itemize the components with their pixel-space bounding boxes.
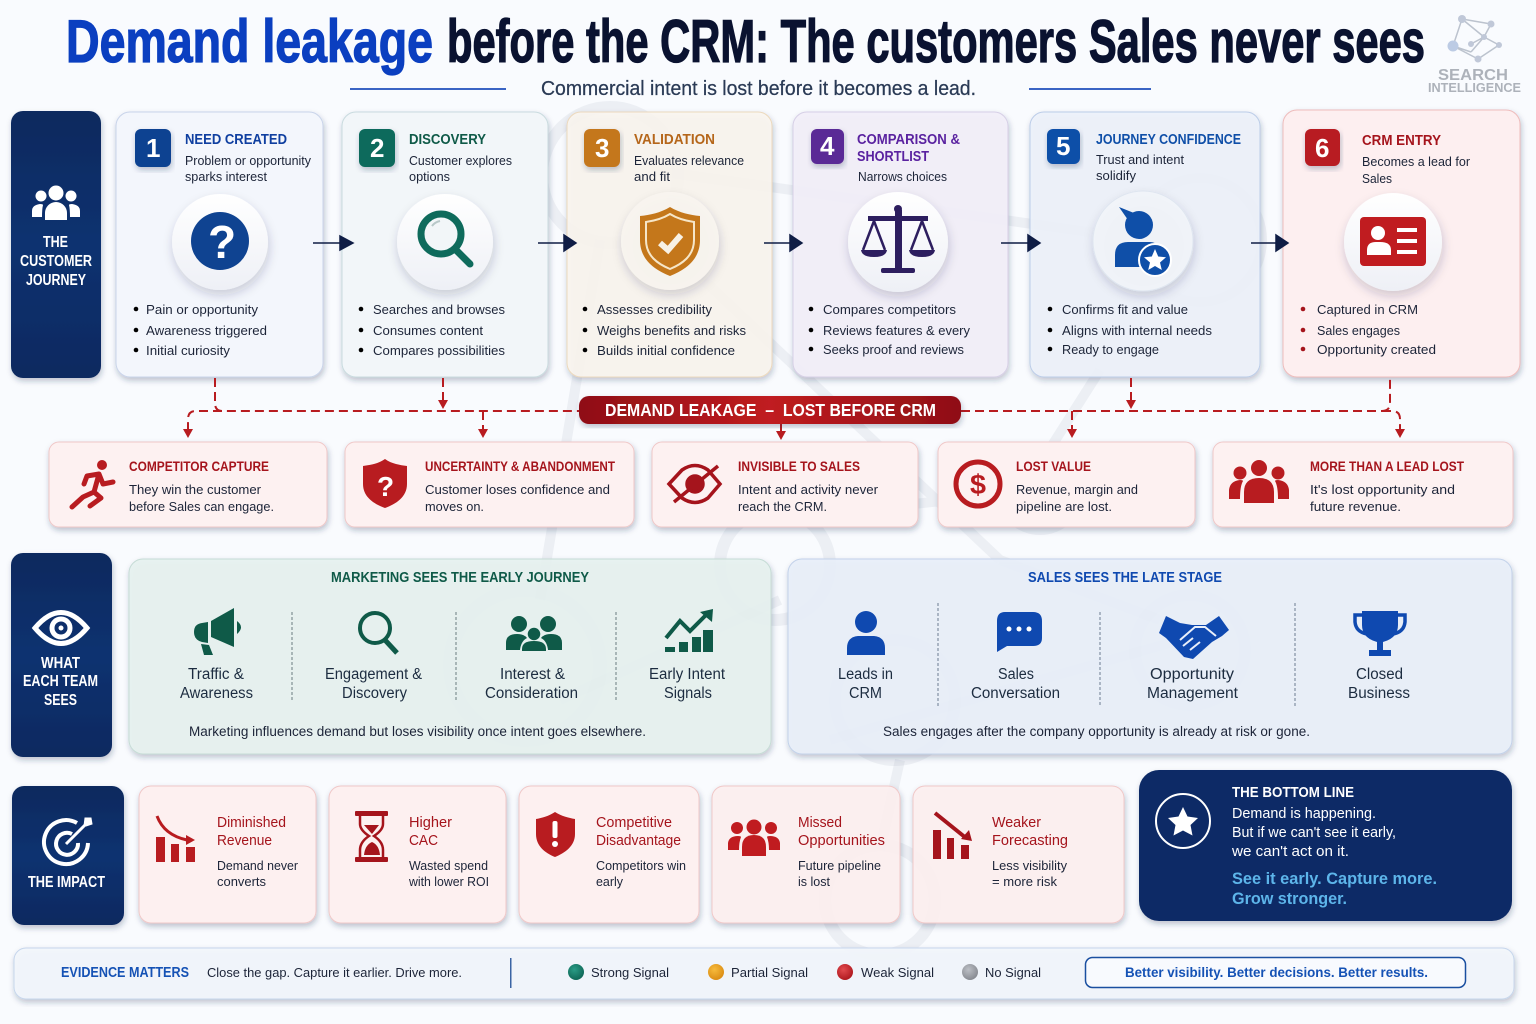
impact card: diminished revenue	[139, 786, 316, 923]
panel: step 6 crm entry: CRM ENTRY	[1362, 133, 1441, 149]
impact card: missed opportunities	[712, 786, 900, 923]
bullet list: Searches and browses	[373, 302, 505, 317]
footer bar: evidence matters and legend	[14, 948, 1514, 999]
icon: eye	[35, 612, 87, 644]
panel: step 2 discovery	[342, 112, 548, 377]
bullet list: Opportunity created	[1317, 342, 1436, 357]
step number 2	[359, 129, 395, 167]
bullet list	[809, 302, 970, 357]
icon: falling bars	[933, 813, 972, 859]
panel: step 4 comparison and shortlist: SHORTLIST	[857, 149, 929, 165]
impact card: missed opportunities: Future pipeline	[798, 858, 881, 873]
icon: hourglass	[355, 811, 388, 862]
bullet list: Aligns with internal needs	[1062, 323, 1213, 338]
item: opportunity management	[1147, 616, 1239, 702]
item: sales conversation	[971, 612, 1060, 702]
icon: shield question	[363, 459, 407, 508]
step number 5	[1047, 129, 1080, 164]
panel: step 4 comparison and shortlist	[793, 112, 1008, 377]
item: opportunity management: Management	[1147, 685, 1239, 702]
footer bar: evidence matters and legend: Close the gap. Capture it earlier. Drive more.	[207, 965, 462, 980]
panel: step 1 need created: Problem or opportunity	[185, 153, 311, 168]
impact card: higher cac: CAC	[409, 832, 438, 849]
impact card: competitive disadvantage: Competitive	[596, 814, 672, 831]
callout: more than a lead lost: MORE THAN A LEAD LOST	[1310, 459, 1465, 474]
legend: strong signal: Strong Signal	[591, 965, 669, 980]
item: opportunity management: Opportunity	[1150, 666, 1234, 683]
icon: people	[1229, 460, 1289, 503]
impact card: diminished revenue: Demand never	[217, 858, 299, 873]
callout: competitor capture: They win the customer	[129, 482, 262, 497]
item: interest and consideration	[485, 616, 578, 702]
subtitle: Commercial intent is lost before it becomes a lead.	[541, 78, 976, 100]
icon: dollar ring: $	[970, 469, 986, 500]
panel: step 1 need created: NEED CREATED	[185, 132, 287, 148]
callout: uncertainty and abandonment	[345, 442, 634, 527]
item: closed business	[1348, 611, 1410, 702]
callout: uncertainty and abandonment: moves on.	[425, 499, 484, 514]
step number 2: 2	[370, 133, 384, 163]
panel: what each team sees: EACH TEAM	[23, 673, 98, 690]
panel: the customer journey: JOURNEY	[26, 272, 87, 289]
panel: step 2 discovery: Customer explores	[409, 153, 512, 168]
icon: question mark	[172, 194, 268, 290]
step number 3	[584, 129, 620, 167]
icon: target	[44, 818, 92, 864]
panel: step 2 discovery: DISCOVERY	[409, 132, 486, 148]
icon: contact card	[1344, 193, 1442, 291]
impact card: weaker forecasting: = more risk	[992, 874, 1057, 889]
logo: search intelligence	[1428, 15, 1521, 95]
item: traffic and awareness: Awareness	[180, 685, 253, 702]
bullet list	[1048, 302, 1213, 357]
panel: what each team sees: WHAT	[41, 655, 80, 672]
panel: sales sees the late stage	[788, 559, 1512, 754]
impact card: competitive disadvantage: Disadvantage	[596, 832, 681, 849]
logo: search intelligence: INTELLIGENCE	[1428, 80, 1521, 95]
callout: invisible to sales: Intent and activity never	[738, 482, 879, 497]
callout: the bottom line: we can't act on it.	[1231, 843, 1349, 860]
callout: the bottom line: See it early. Capture more.	[1232, 869, 1437, 888]
step number 3: 3	[595, 133, 609, 163]
impact card: missed opportunities: Missed	[798, 814, 842, 831]
panel: the customer journey	[11, 111, 101, 378]
bullet list: Assesses credibility	[597, 302, 712, 317]
impact card: higher cac: Wasted spend	[409, 858, 488, 873]
icon: magnifier	[397, 194, 493, 290]
panel: step 2 discovery: options	[409, 169, 450, 184]
bullet list: Sales engages	[1317, 323, 1400, 338]
impact card: missed opportunities: is lost	[798, 874, 830, 889]
bullet list: Consumes content	[373, 323, 483, 338]
callout: competitor capture: COMPETITOR CAPTURE	[129, 459, 269, 474]
panel: step 5 journey confidence	[1030, 112, 1260, 377]
panel: the impact: THE IMPACT	[28, 874, 105, 891]
icon: shield question: ?	[377, 471, 394, 502]
icon: crossed eye	[669, 466, 720, 502]
panel: step 6 crm entry	[1283, 110, 1520, 377]
callout: more than a lead lost: future revenue.	[1310, 499, 1401, 514]
step number 1: 1	[146, 133, 160, 163]
item: early intent signals	[649, 609, 726, 702]
footer bar: evidence matters and legend: EVIDENCE MATTERS	[61, 965, 189, 981]
bullet list: Compares possibilities	[373, 343, 505, 358]
panel: step 6 crm entry: Becomes a lead for	[1362, 154, 1471, 169]
item: early intent signals: Early Intent	[649, 666, 726, 683]
arrows between steps	[313, 235, 1288, 251]
icon: shield alert	[536, 812, 575, 857]
impact card: higher cac: Higher	[409, 814, 452, 831]
impact card: competitive disadvantage: early	[596, 874, 623, 889]
item: engagement and discovery	[325, 613, 423, 702]
panel: step 6 crm entry: Sales	[1362, 171, 1392, 186]
panel: step 3 validation	[567, 112, 772, 377]
impact card: diminished revenue: Revenue	[217, 832, 272, 849]
item: leads in crm: Leads in	[838, 666, 893, 683]
step number 1	[135, 129, 171, 167]
callout: uncertainty and abandonment: Customer loses confidence and	[425, 482, 610, 497]
item: interest and consideration: Consideration	[485, 685, 578, 702]
item: traffic and awareness	[180, 608, 253, 702]
callout: better visibility pill	[1086, 958, 1466, 988]
item: leads in crm: CRM	[849, 685, 882, 702]
banner: demand leakage	[579, 396, 961, 424]
callout: competitor capture: before Sales can engage.	[129, 499, 274, 514]
panel: step 3 validation: VALIDATION	[634, 132, 715, 148]
bullet list: Awareness triggered	[146, 323, 267, 338]
icon: question mark: ?	[208, 216, 236, 268]
callout: the bottom line: THE BOTTOM LINE	[1232, 785, 1354, 801]
panel: step 5 journey confidence: solidify	[1096, 168, 1136, 183]
callout: the bottom line: But if we can't see it early,	[1232, 824, 1396, 841]
callout: more than a lead lost: It's lost opportunity and	[1310, 482, 1455, 497]
panel: what each team sees: SEES	[44, 692, 77, 709]
bullet list	[1301, 302, 1436, 357]
panel: step 4 comparison and shortlist: Narrows choices	[858, 169, 947, 184]
item: engagement and discovery: Discovery	[342, 685, 407, 702]
bullet list: Builds initial confidence	[597, 343, 735, 358]
item: leads in crm	[838, 611, 893, 702]
bullet list: Weighs benefits and risks	[597, 323, 747, 338]
impact card: competitive disadvantage: Competitors win	[596, 858, 686, 873]
bullet list: Seeks proof and reviews	[823, 342, 964, 357]
panel: the customer journey: THE	[43, 234, 68, 251]
callout: the bottom line: Grow stronger.	[1232, 889, 1347, 908]
panel: sales sees the late stage: Sales engages after the company opportunity is already at risk or gone.	[883, 724, 1310, 739]
bullet list	[583, 302, 747, 358]
panel: sales sees the late stage: SALES SEES THE LATE STAGE	[1028, 570, 1222, 586]
item: interest and consideration: Interest &	[500, 666, 566, 683]
item: closed business: Closed	[1356, 666, 1403, 683]
bullet list: Reviews features & every	[823, 323, 970, 338]
icon: star badge	[1156, 794, 1210, 848]
callout: lost value: pipeline are lost.	[1016, 499, 1112, 514]
item: sales conversation: Sales	[998, 666, 1034, 683]
step number 6: 6	[1315, 133, 1329, 163]
legend: no signal: No Signal	[985, 965, 1041, 980]
panel: what each team sees	[11, 553, 112, 757]
step number 4: 4	[820, 131, 835, 161]
panel: step 1 need created: sparks interest	[185, 169, 267, 184]
callout: competitor capture	[49, 442, 327, 527]
callout: invisible to sales	[652, 442, 918, 527]
logo: search intelligence: SEARCH	[1438, 67, 1508, 84]
callout: the bottom line: Demand is happening.	[1232, 805, 1376, 822]
item: closed business: Business	[1348, 685, 1410, 702]
bullet list: Confirms fit and value	[1062, 302, 1188, 317]
callout: better visibility pill: Better visibility. Better decisions. Better results.	[1125, 964, 1428, 980]
title	[66, 8, 1425, 75]
callout: uncertainty and abandonment: UNCERTAINTY & ABANDONMENT	[425, 459, 616, 474]
bullet list: Initial curiosity	[146, 343, 231, 358]
impact card: competitive disadvantage	[519, 786, 699, 923]
impact card: diminished revenue: Diminished	[217, 814, 286, 831]
panel: step 1 need created	[116, 112, 323, 377]
bullet list	[134, 302, 267, 358]
impact card: weaker forecasting: Weaker	[992, 814, 1041, 831]
title: Demand leakage	[66, 8, 433, 75]
impact card: missed opportunities: Opportunities	[798, 832, 885, 849]
icon: scales	[848, 192, 948, 292]
panel: step 5 journey confidence: Trust and intent	[1096, 152, 1184, 167]
impact card: weaker forecasting: Less visibility	[992, 858, 1067, 873]
callout: more than a lead lost	[1213, 442, 1513, 527]
icon: falling chart	[156, 816, 195, 862]
impact card: higher cac	[329, 786, 506, 923]
step number 4	[811, 129, 844, 164]
panel: step 3 validation: Evaluates relevance	[634, 153, 744, 168]
panel: marketing sees the early journey	[129, 559, 771, 754]
panel: the customer journey: CUSTOMER	[20, 253, 92, 270]
item: engagement and discovery: Engagement &	[325, 666, 423, 683]
leakage connectors	[183, 378, 1405, 440]
callout: the bottom line	[1139, 770, 1512, 921]
legend: weak signal: Weak Signal	[861, 965, 934, 980]
panel: step 5 journey confidence: JOURNEY CONFIDENCE	[1096, 132, 1241, 148]
panel: the impact	[12, 786, 124, 925]
impact card: weaker forecasting: Forecasting	[992, 832, 1068, 849]
item: traffic and awareness: Traffic &	[188, 666, 245, 683]
impact card: weaker forecasting	[913, 786, 1124, 923]
callout: lost value: LOST VALUE	[1016, 459, 1091, 474]
callout: lost value: Revenue, margin and	[1016, 482, 1138, 497]
panel: step 3 validation: and fit	[634, 169, 670, 184]
step number 5: 5	[1056, 131, 1070, 161]
bullet list: Pain or opportunity	[146, 302, 259, 317]
step number 6	[1305, 129, 1340, 166]
banner: demand leakage: DEMAND LEAKAGE – LOST BEFORE CRM	[605, 400, 936, 420]
icon: person with star	[1093, 191, 1193, 291]
item: sales conversation: Conversation	[971, 685, 1060, 702]
bullet list	[359, 302, 505, 358]
icon: people	[32, 186, 80, 220]
panel: step 4 comparison and shortlist: COMPARISON &	[857, 132, 960, 148]
callout: lost value	[938, 442, 1195, 527]
callout: invisible to sales: reach the CRM.	[738, 499, 827, 514]
legend: partial signal: Partial Signal	[731, 965, 808, 980]
bullet list: Ready to engage	[1062, 342, 1159, 357]
legend: no signal	[962, 964, 1041, 980]
callout: invisible to sales: INVISIBLE TO SALES	[738, 459, 860, 474]
bullet list: Captured in CRM	[1317, 302, 1418, 317]
icon: runner	[72, 460, 113, 507]
bullet list: Compares competitors	[823, 302, 956, 317]
icon: shield check	[621, 192, 719, 290]
panel: marketing sees the early journey: Marketing influences demand but loses visibility once intent goes elsewhere.	[189, 724, 646, 739]
impact card: diminished revenue: converts	[217, 874, 266, 889]
impact card: higher cac: with lower ROI	[408, 874, 489, 889]
panel: marketing sees the early journey: MARKETING SEES THE EARLY JOURNEY	[331, 570, 589, 586]
icon: people	[728, 820, 780, 856]
icon: dollar ring	[956, 462, 1000, 506]
item: early intent signals: Signals	[664, 685, 712, 702]
